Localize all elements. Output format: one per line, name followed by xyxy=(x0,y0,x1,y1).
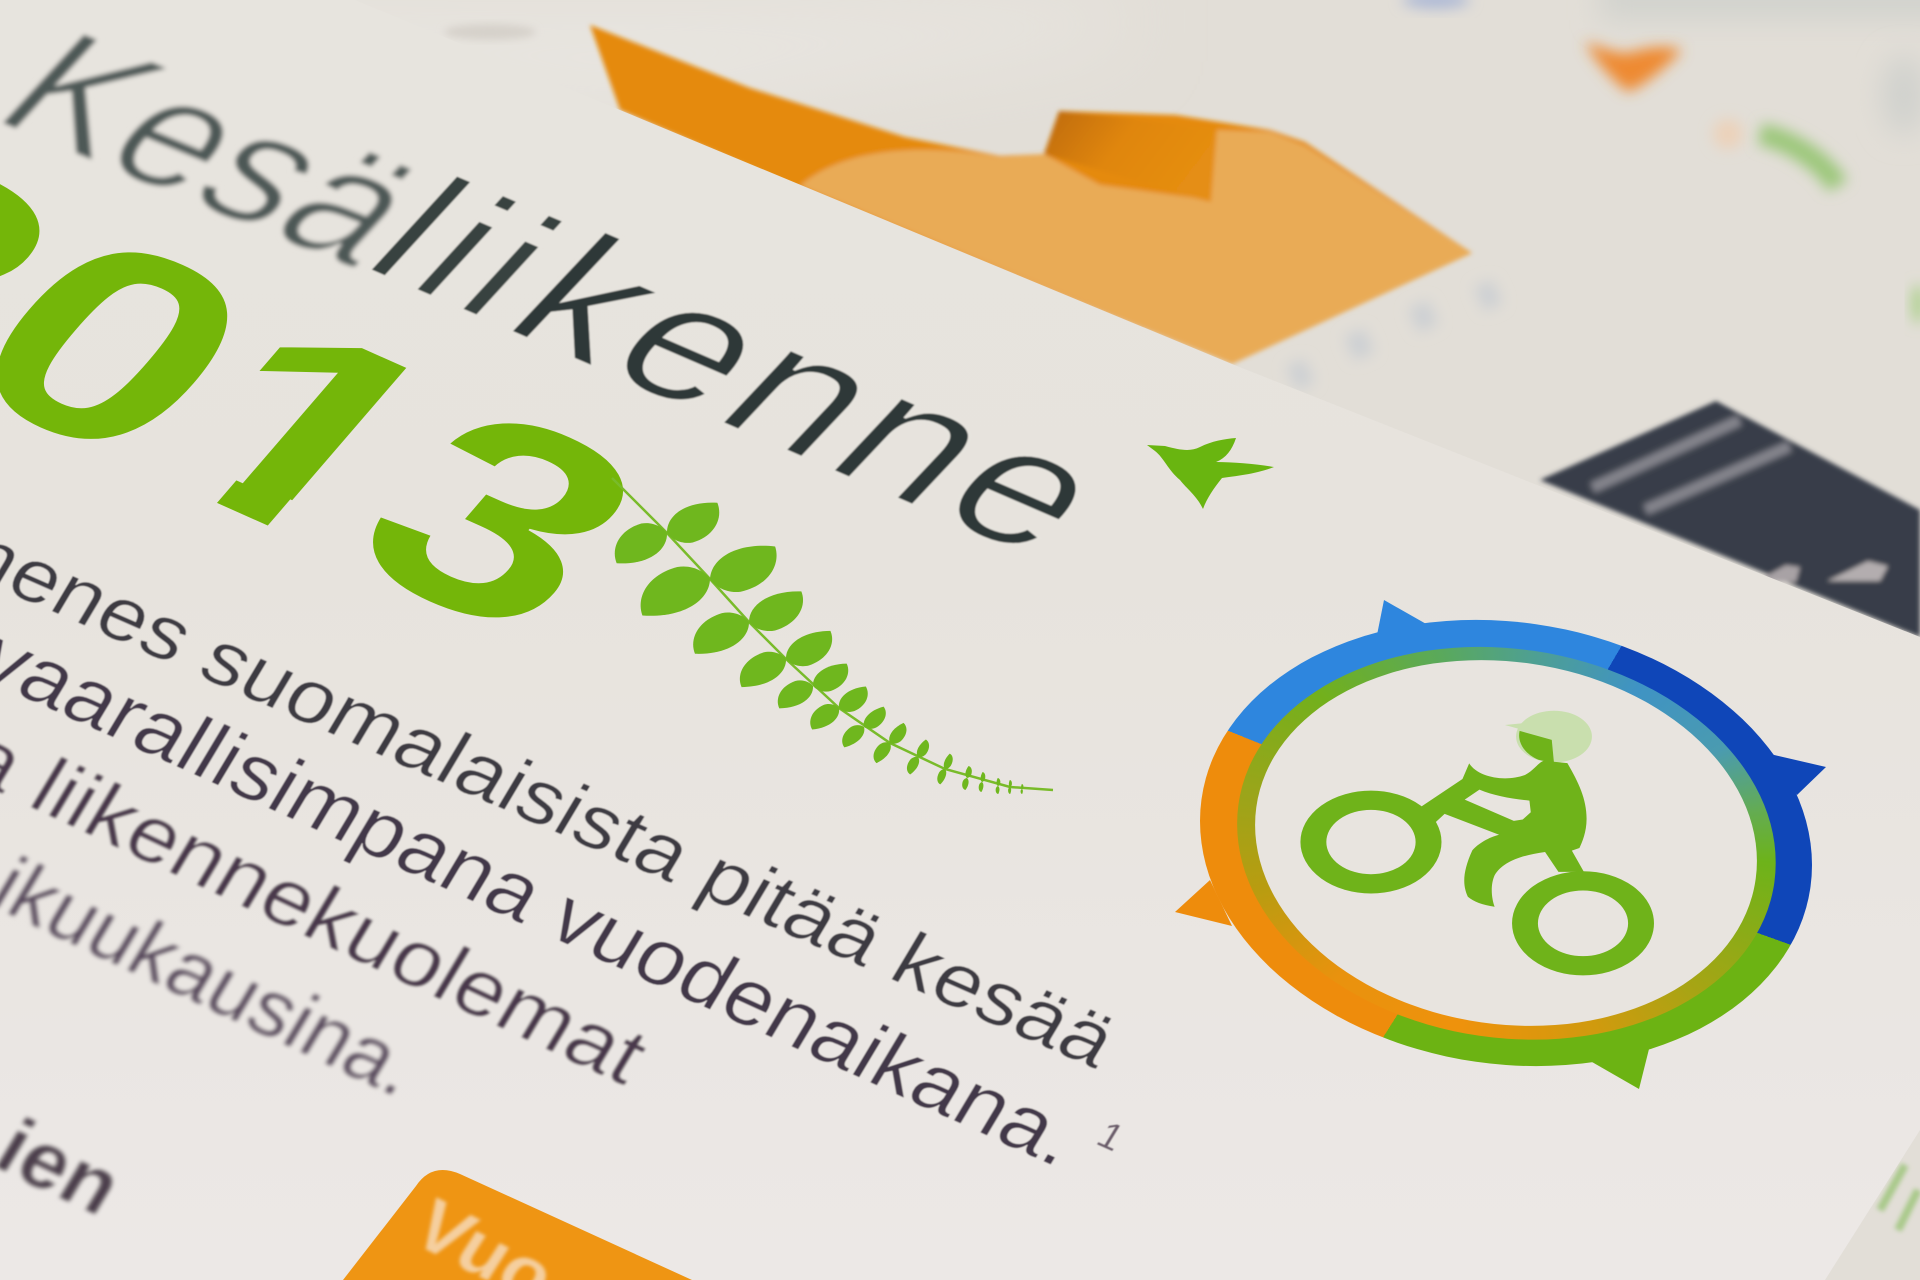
icon: compass spikes xyxy=(1175,600,1826,1089)
icon: bird xyxy=(1147,438,1274,509)
inner gradient ring xyxy=(1237,629,1775,1057)
orange callout box xyxy=(343,1170,692,1280)
blurred background orange shape xyxy=(590,25,1472,364)
icon: leafy vine xyxy=(606,478,1053,794)
outer ring segments xyxy=(1200,599,1812,1087)
blurred background marks xyxy=(444,0,1920,390)
inner disc xyxy=(1255,643,1757,1043)
title: Kesäliikenne: kenne xyxy=(470,201,1159,590)
title: Kesäliikenne: lii xyxy=(332,147,604,352)
blurred green text on back sheet xyxy=(1880,1165,1918,1230)
body text: 1 xyxy=(1089,1114,1131,1160)
title: Kesäliikenne xyxy=(0,0,1159,590)
dark background panel xyxy=(1540,401,1920,637)
logo: cyclist in compass ring xyxy=(1175,600,1826,1089)
icon: cyclist xyxy=(1300,710,1654,976)
